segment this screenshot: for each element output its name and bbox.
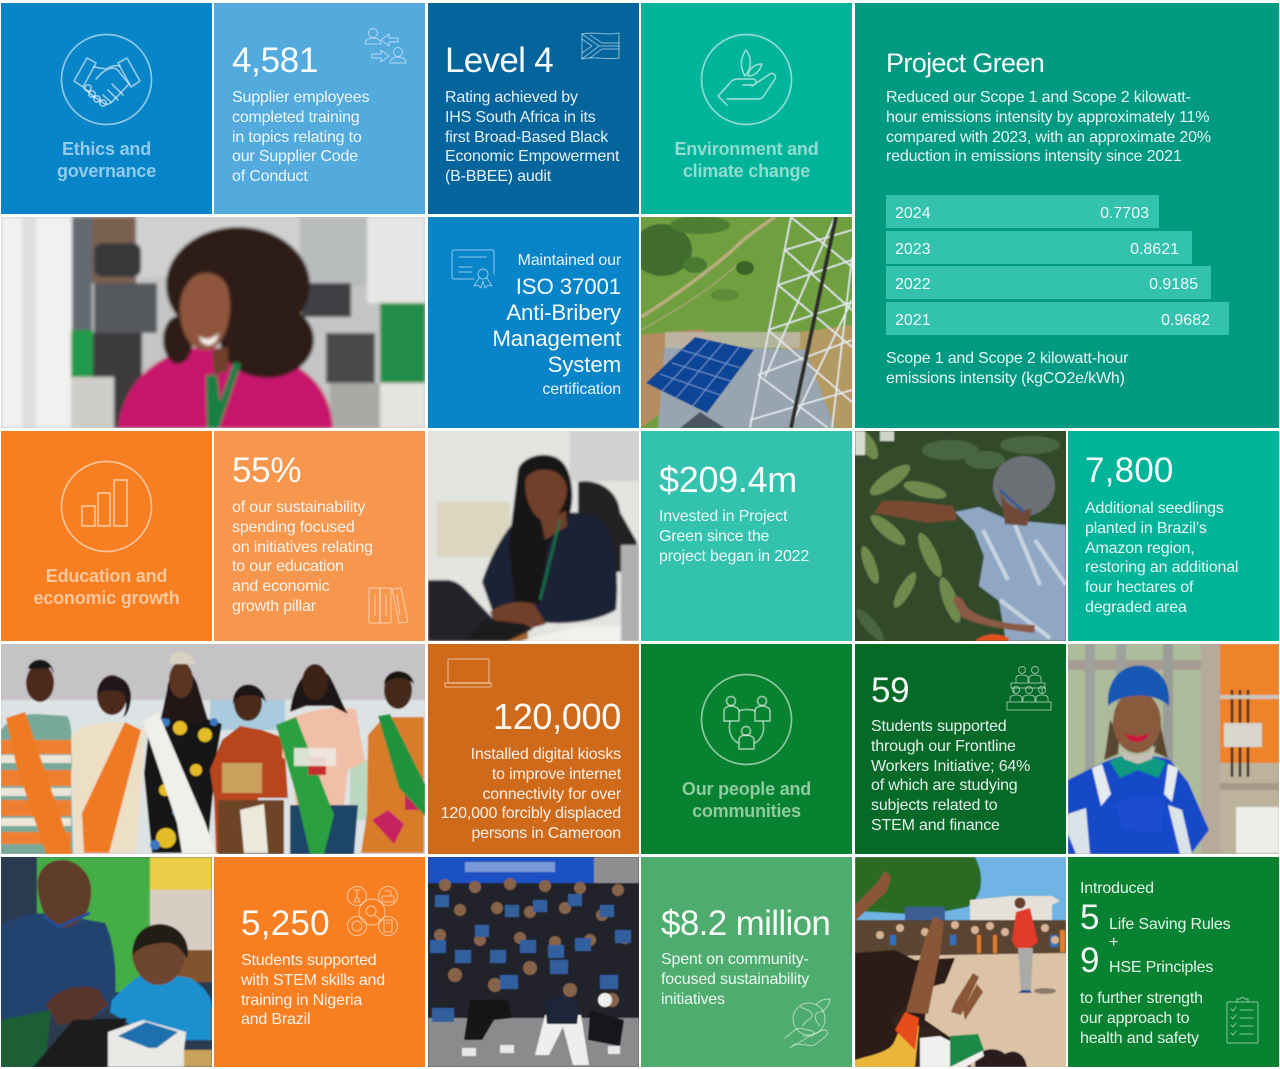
icon: books xyxy=(368,588,408,624)
icon: clipboard checklist xyxy=(1226,997,1258,1044)
icon: hand holding leaf xyxy=(700,34,792,126)
description xyxy=(1080,990,1203,1047)
bar: 2023: 2023 xyxy=(895,241,931,258)
chart caption xyxy=(886,350,1128,387)
stat: Level 4 xyxy=(445,41,553,80)
stat: 4,581 xyxy=(232,41,318,80)
description: Economic Empowerment xyxy=(445,148,619,165)
panel: supplier training xyxy=(214,3,425,214)
panel: Project Green investment xyxy=(641,431,852,641)
description: degraded area xyxy=(1085,599,1187,616)
panel: ethics and governance xyxy=(1,3,212,214)
icon: people exchange xyxy=(364,28,406,64)
description: and economic xyxy=(232,578,329,595)
description: compared with 2023, with an approximate 20% xyxy=(886,129,1211,146)
heading xyxy=(682,779,811,821)
heading xyxy=(57,139,156,181)
photo: solar panels and telecom tower xyxy=(641,217,852,428)
certification title xyxy=(492,274,622,377)
heading: communities xyxy=(692,801,801,821)
description: STEM and finance xyxy=(871,817,1000,834)
description: Spent on community- xyxy=(661,951,809,968)
description: on initiatives relating xyxy=(232,539,373,556)
description: with STEM skills and xyxy=(241,972,385,989)
bar: 2021 xyxy=(886,302,1229,335)
description: spending focused xyxy=(232,519,355,536)
description: of Conduct xyxy=(232,168,308,185)
description xyxy=(232,499,373,615)
stat: 55% xyxy=(232,451,301,490)
description xyxy=(659,508,809,565)
photo: worker in blue overalls and hard hat xyxy=(1068,644,1279,854)
description: Supplier employees xyxy=(232,89,369,106)
panel: community investment xyxy=(641,857,852,1067)
description: reduction in emissions intensity since 2021 xyxy=(886,148,1182,165)
photo: large group of students holding certificates xyxy=(428,857,639,1067)
photo: speaker in red vest with crowd of children xyxy=(855,857,1066,1067)
icon: laptop xyxy=(444,658,492,688)
description: (B-BBEE) audit xyxy=(445,168,551,185)
heading: climate change xyxy=(683,161,810,181)
icon: handshake xyxy=(60,34,152,126)
bar: 2022: 2022 xyxy=(895,276,931,293)
description xyxy=(886,89,1211,165)
panel: education and economic growth xyxy=(1,431,212,641)
description: planted in Brazil’s xyxy=(1085,520,1207,537)
description: Green since the xyxy=(659,528,769,545)
description xyxy=(232,89,369,185)
heading: Environment and xyxy=(674,139,818,159)
description: persons in Cameroon xyxy=(471,825,621,842)
icon: South African flag xyxy=(582,32,620,60)
description: Rating achieved by xyxy=(445,89,578,106)
stat: 59 xyxy=(871,671,909,710)
description: our approach to xyxy=(1080,1010,1189,1027)
intro text: Maintained our xyxy=(518,252,621,269)
bar: 2023: 0.8621 xyxy=(1130,241,1179,258)
description: project began in 2022 xyxy=(659,548,809,565)
description: Students supported xyxy=(241,952,377,969)
description: restoring an additional xyxy=(1085,559,1238,576)
panel: environment and climate change xyxy=(641,3,852,214)
description xyxy=(445,89,620,185)
bar: 2023 xyxy=(886,231,1192,264)
description: connectivity for over xyxy=(482,786,621,803)
stat: 9: 9 xyxy=(1080,941,1099,980)
certification title: Management xyxy=(492,326,621,351)
description: our Supplier Code xyxy=(232,148,358,165)
icon: STEM network xyxy=(347,886,398,936)
description: Invested in Project xyxy=(659,508,787,525)
description: in topics relating to xyxy=(232,129,362,146)
description: health and safety xyxy=(1080,1030,1199,1047)
heading: Our people and xyxy=(682,779,811,799)
panel: our people and communities xyxy=(641,644,852,854)
description: completed training xyxy=(232,109,360,126)
stat: 5: 5 xyxy=(1080,898,1099,937)
description: first Broad-Based Black xyxy=(445,129,608,146)
icon: people group xyxy=(700,674,792,766)
panel: Frontline Workers Initiative xyxy=(855,644,1066,854)
panel: Project Green xyxy=(855,3,1279,428)
description: growth pillar xyxy=(232,598,316,615)
description: Students supported xyxy=(871,718,1007,735)
title: Project Green xyxy=(886,48,1044,78)
bar: 2021: 0.9682 xyxy=(1161,312,1210,329)
description: of which are studying xyxy=(871,777,1018,794)
photo: girls with sashes and awards xyxy=(1,644,425,854)
description xyxy=(871,718,1030,834)
label: HSE Principles: HSE Principles xyxy=(1109,959,1213,976)
bar: 2021: 2021 xyxy=(895,312,931,329)
heading xyxy=(674,139,818,181)
description xyxy=(661,951,810,1008)
stat: $8.2 million xyxy=(661,904,830,943)
icon: classroom xyxy=(1006,666,1052,710)
description: initiatives xyxy=(661,991,725,1008)
description: through our Frontline xyxy=(871,738,1016,755)
panel: B-BBEE level xyxy=(428,3,639,214)
stat: $209.4m xyxy=(659,459,797,500)
stat: 120,000 xyxy=(493,696,621,737)
heading xyxy=(33,566,180,608)
description: Additional seedlings xyxy=(1085,500,1224,517)
description: Amazon region, xyxy=(1085,540,1195,557)
bar: 2022: 0.9185 xyxy=(1149,276,1198,293)
closing text: certification xyxy=(542,381,621,398)
icon: certificate xyxy=(452,250,494,288)
panel: STEM students xyxy=(214,857,425,1067)
certification title: System xyxy=(548,352,621,377)
heading: economic growth xyxy=(33,588,180,608)
plus sign: + xyxy=(1109,934,1118,951)
panel: ISO 37001 certification xyxy=(428,217,639,428)
intro text: Introduced xyxy=(1080,880,1154,897)
icon: bar chart xyxy=(60,460,152,552)
photo: man tending plants in the forest xyxy=(855,431,1066,641)
description: focused sustainability xyxy=(661,971,809,988)
description xyxy=(441,746,622,842)
description: to further strength xyxy=(1080,990,1203,1007)
bar: 2024: 2024 xyxy=(895,205,931,222)
certification title: Anti-Bribery xyxy=(506,300,621,325)
description: training in Nigeria xyxy=(241,992,362,1009)
description: Installed digital kiosks xyxy=(471,746,621,763)
heading: Ethics and xyxy=(62,139,151,159)
description: 120,000 forcibly displaced xyxy=(441,805,621,822)
label: Life Saving Rules: Life Saving Rules xyxy=(1109,916,1230,933)
panel: life saving rules and HSE principles xyxy=(1068,857,1279,1067)
description: IHS South Africa in its xyxy=(445,109,596,126)
description xyxy=(1085,500,1238,616)
bar: 2024: 0.7703 xyxy=(1100,205,1149,222)
description: four hectares of xyxy=(1085,579,1193,596)
description: subjects related to xyxy=(871,797,997,814)
description: Workers Initiative; 64% xyxy=(871,758,1030,775)
description: and Brazil xyxy=(241,1011,310,1028)
description: Reduced our Scope 1 and Scope 2 kilowatt- xyxy=(886,89,1191,106)
chart caption: emissions intensity (kgCO2e/kWh) xyxy=(886,370,1125,387)
heading: Education and xyxy=(46,566,167,586)
description: to improve internet xyxy=(492,766,621,783)
stat: 5,250 xyxy=(241,904,330,943)
bar: 2024 xyxy=(886,195,1159,228)
stat: 7,800 xyxy=(1085,451,1174,490)
chart caption: Scope 1 and Scope 2 kilowatt-hour xyxy=(886,350,1128,367)
photo: woman working on a laptop xyxy=(428,431,639,641)
description: hour emissions intensity by approximately 11% xyxy=(886,109,1209,126)
panel: digital kiosks xyxy=(428,644,639,854)
photo: smiling woman in pink at desk xyxy=(1,217,425,428)
panel: seedlings planted xyxy=(1068,431,1279,641)
description: to our education xyxy=(232,558,344,575)
icon: hand holding globe xyxy=(784,998,830,1048)
description: of our sustainability xyxy=(232,499,365,516)
certification title: ISO 37001 xyxy=(516,274,621,299)
panel: sustainability spending xyxy=(214,431,425,641)
photo: man and girl with electronics kit xyxy=(1,857,212,1067)
heading: governance xyxy=(57,161,156,181)
bar: 2022 xyxy=(886,266,1211,299)
description xyxy=(241,952,385,1028)
